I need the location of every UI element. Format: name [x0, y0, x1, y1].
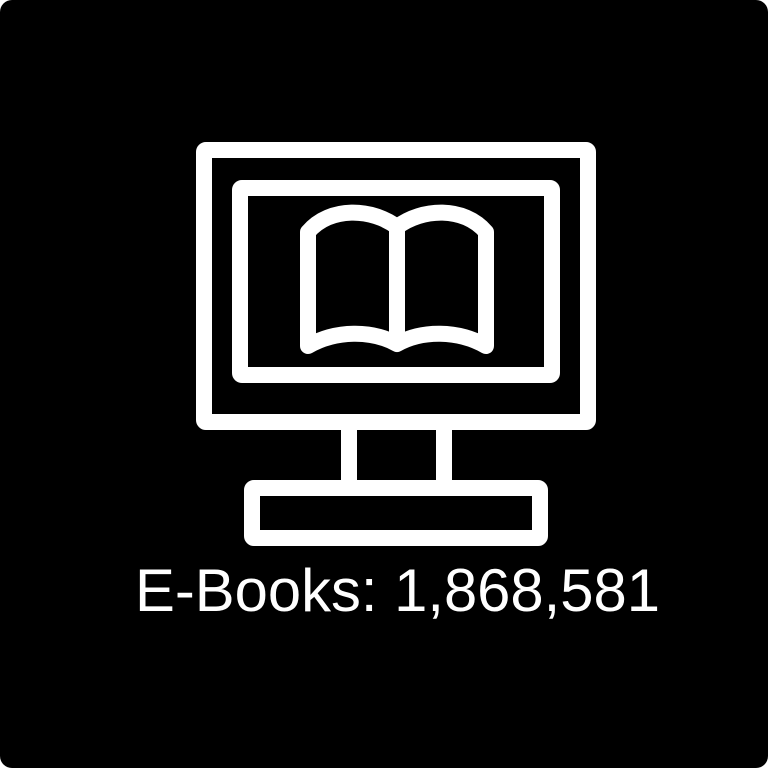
monitor base — [252, 488, 540, 538]
label: e-books count: E-Books: 1,868,581 — [135, 557, 660, 624]
monitor outer frame — [204, 150, 588, 422]
monitor neck — [349, 430, 444, 480]
icon: computer monitor with book — [204, 150, 588, 538]
icon: open book — [308, 213, 486, 346]
monitor screen — [240, 188, 552, 375]
